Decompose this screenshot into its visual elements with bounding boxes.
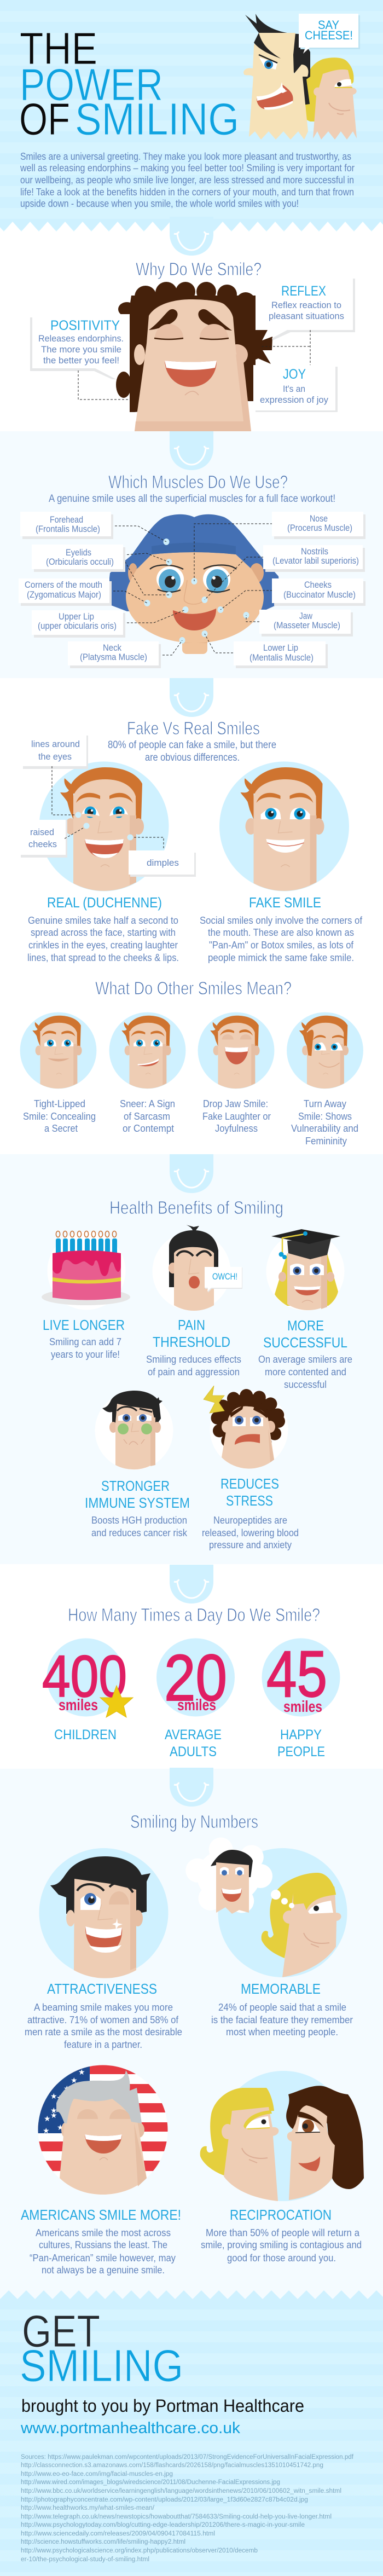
text: attractiveness: attractive. 71% of women and 58% of	[27, 2015, 179, 2025]
stat: children 400 smiles: CHILDREN	[54, 1727, 117, 1743]
label: corners of the mouth	[19, 578, 112, 606]
label: nostrils: Nostrils	[301, 547, 328, 557]
callout: lines around the eyes: lines around	[31, 739, 80, 749]
benefit: pain threshold: THRESHOLD	[153, 1334, 230, 1350]
illustration: american flag man	[33, 2065, 168, 2195]
footer title: get smiling: SMILING	[20, 2340, 183, 2391]
benefit: pain threshold: of pain and aggression	[148, 1367, 240, 1377]
speech bubble: say cheese	[299, 14, 360, 54]
illustration: american flag man: ★	[50, 2111, 57, 2120]
heading: which muscles: Which Muscles Do We Use?	[108, 472, 288, 492]
label: neck	[68, 641, 161, 668]
woman	[298, 57, 357, 140]
text: attractiveness: ATTRACTIVENESS	[47, 1981, 157, 1997]
captions: other smiles: of Sarcasm	[124, 1111, 170, 1122]
title: POWER	[20, 59, 163, 110]
label: cheeks: (Buccinator Muscle)	[283, 590, 356, 600]
text: attractiveness: feature in a partner.	[64, 2039, 142, 2050]
text: fake smile: people mimick the same fake smile.	[208, 952, 354, 963]
stat: children 400 smiles: smiles	[59, 1697, 98, 1714]
stat: average adults 20 smiles: ADULTS	[170, 1744, 217, 1759]
text: memorable	[211, 1981, 353, 2037]
illustration: american flag man: ★	[56, 2093, 63, 2102]
smile tab 3	[170, 678, 213, 717]
callout: positivity: POSITIVITY	[50, 318, 120, 333]
face: turn away	[287, 1012, 363, 1089]
text: americans smile more: not always be a genuine smile.	[42, 2265, 165, 2276]
text: fake smile: the mouth. These are also known as	[208, 927, 354, 938]
heading: why do we smile: Why Do We Smile?	[136, 259, 262, 279]
illustration: american flag man: ★	[50, 2106, 57, 2115]
footer: brought to you by: brought to you by Portman Healthcare	[21, 2396, 304, 2416]
heading: health benefits: Health Benefits of Smiling	[109, 1197, 283, 1218]
title: OF	[19, 94, 70, 144]
benefit: reduces stress	[202, 1475, 299, 1550]
callout: raised cheeks: cheeks	[28, 839, 57, 849]
text: reciprocation	[201, 2207, 362, 2264]
sources: http://www.wired.com/images_blogs/wiredscience/2011/08/Duchenne-FacialExpressions.jpg	[21, 2479, 280, 2486]
callout: reflex: Reflex reaction to	[271, 300, 341, 310]
captions: other smiles: Turn Away	[304, 1098, 346, 1109]
label: nostrils: (Levator labil superioris)	[272, 556, 359, 566]
label: eyelids	[32, 545, 125, 572]
illustration: winking man	[39, 1848, 169, 1978]
callout: reflex: pleasant situations	[269, 311, 344, 321]
illustration: american flag man: ★	[50, 2092, 57, 2100]
illustration: real duchenne smile	[21, 736, 196, 891]
title: THE	[20, 23, 97, 74]
smile tab 5	[170, 1565, 213, 1604]
label: nostrils	[263, 545, 365, 572]
illustration: smiling man and woman	[243, 14, 360, 140]
text: attractiveness	[25, 1981, 182, 2050]
label: cheeks	[272, 578, 365, 606]
benefit: stronger immune system: STRONGER	[101, 1478, 170, 1494]
benefit: stronger immune system: Boosts HGH production	[91, 1515, 187, 1526]
benefit: more successful: SUCCESSFUL	[263, 1334, 347, 1351]
speech bubble: say cheese: CHEESE!	[305, 28, 353, 42]
captions: other smiles: Drop Jaw Smile:	[203, 1098, 268, 1109]
benefit: reduces stress: REDUCES	[220, 1475, 279, 1492]
illustration: face with muscle points	[107, 514, 281, 655]
label: upper lip	[32, 610, 125, 638]
smile tab 2	[170, 431, 213, 470]
callout: dimples	[129, 850, 196, 877]
illustration: curly-haired face with closed eyes	[116, 282, 272, 431]
benefit: live longer: years to your life!	[51, 1349, 120, 1360]
illustration: birthday cake	[42, 1231, 130, 1310]
stat: happy people 45 smiles	[262, 1637, 340, 1759]
benefit: stronger immune system: IMMUNE SYSTEM	[85, 1495, 190, 1511]
sources: http://www.telegraph.co.uk/news/newstopics/howaboutthat/7584633/Smiling-could-help-you-live-longer.html	[21, 2514, 332, 2520]
benefit: pain threshold	[146, 1317, 241, 1377]
captions: other smiles: Femininity	[305, 1136, 347, 1147]
text: memorable: 24% of people said that a smile	[218, 2002, 346, 2013]
label: jaw	[259, 610, 353, 636]
smile tab 6	[170, 1768, 213, 1807]
speech bubble: owch	[205, 1267, 242, 1293]
text: reciprocation: good for those around you.	[227, 2253, 336, 2264]
heading: fake smile: FAKE SMILE	[249, 894, 321, 911]
text: real smile: crinkles in the eyes, creating laughter	[28, 940, 178, 951]
benefit: reduces stress: STRESS	[226, 1492, 273, 1509]
sources: http://www.eo-eo-face.com/img/facial-muscles-en.jpg	[21, 2471, 173, 2477]
label: upper lip: (upper obicularis oris)	[38, 621, 117, 631]
illustration: american flag man: ★	[71, 2076, 78, 2085]
sources	[21, 2454, 354, 2563]
benefit: reduces stress: pressure and anxiety	[209, 1539, 292, 1550]
label: forehead: (Frontalis Muscle)	[36, 524, 100, 534]
text: real smile: Genuine smiles take half a second to	[28, 915, 178, 926]
man	[243, 14, 310, 140]
benefit: stronger immune system	[85, 1478, 190, 1538]
captions: other smiles	[23, 1098, 358, 1147]
subtitle: fake vs real: are obvious differences.	[145, 752, 240, 763]
brunette face	[286, 2086, 364, 2200]
illustration: stressed face	[204, 1386, 288, 1469]
benefit: reduces stress: released, lowering blood	[202, 1527, 299, 1538]
illustration: american flag man: ★	[43, 2126, 50, 2135]
sources: http://www.sciencedaily.com/releases/2009/04/090417084115.html	[21, 2531, 215, 2537]
illustration: american flag man: ★	[63, 2084, 71, 2093]
heading: smiling by numbers: Smiling by Numbers	[130, 1811, 258, 1832]
illustration: woman remembering a smile	[197, 1848, 347, 1977]
speech bubble: owch: OWCH!	[212, 1271, 237, 1282]
blonde face	[200, 2088, 278, 2201]
subtitle: fake vs real: 80% of people can fake a smile, but there	[108, 739, 276, 751]
callout: raised cheeks	[21, 820, 67, 858]
label: nose: (Procerus Muscle)	[287, 523, 352, 533]
captions: other smiles: a Secret	[44, 1123, 78, 1134]
heading: other smiles: What Do Other Smiles Mean?	[95, 978, 292, 998]
callout: lines around the eyes	[23, 736, 88, 769]
text: memorable: MEMORABLE	[241, 1981, 321, 1997]
footer title: get smiling	[20, 2306, 183, 2391]
sources: er-10/the-psychological-study-of-smiling.html	[21, 2556, 149, 2563]
benefit: live longer	[43, 1317, 125, 1360]
illustration: pain face	[152, 1225, 242, 1311]
text: reciprocation: smile, proving smiling is contagious and	[201, 2239, 362, 2250]
stat: average adults 20 smiles: 20	[164, 1641, 227, 1715]
intro text: upside down - because when you smile, the whole world smiles with you!	[20, 198, 299, 209]
benefit: more successful: successful	[284, 1379, 327, 1390]
stat: children 400 smiles: 400	[42, 1643, 127, 1709]
callout: dimples: dimples	[147, 858, 179, 868]
benefit: more successful	[258, 1317, 352, 1390]
intro text	[20, 151, 355, 209]
label: corners of the mouth: Corners of the mouth	[25, 580, 102, 590]
benefit: stronger immune system: and reduces cancer risk	[91, 1527, 188, 1538]
label: neck: Neck	[103, 643, 122, 653]
thought bubble	[197, 1849, 294, 1914]
label: lower lip	[234, 641, 328, 668]
speech bubble: say cheese: SAY	[318, 18, 339, 32]
sources: http://www.bbc.co.uk/worldservice/learningenglish/language/wordsinthenews/2010/06/100602_witn_smile.shtml	[21, 2488, 341, 2494]
label: jaw: Jaw	[299, 611, 312, 621]
label: nose: Nose	[310, 514, 328, 524]
stat: average adults 20 smiles	[156, 1639, 235, 1759]
text: memorable: most when meeting people.	[226, 2027, 338, 2037]
label: forehead: Forehead	[50, 515, 83, 525]
text: real smile: spread across the face, starting with	[31, 927, 176, 938]
smile tab 4	[170, 1154, 213, 1193]
captions: other smiles: Smile: Concealing	[23, 1111, 96, 1122]
face: sneer	[109, 1012, 185, 1089]
sources: http://science.howstuffworks.com/life/smiling-happy2.html	[21, 2539, 185, 2545]
text: fake smile: "Pan-Am" or Botox smiles, as lots of	[209, 940, 354, 951]
label: eyelids: (Orbicularis occuli)	[46, 557, 114, 567]
icon: star	[100, 1686, 133, 1717]
benefit: more successful: MORE	[287, 1317, 324, 1334]
callout: positivity	[30, 314, 130, 400]
callout: reflex: REFLEX	[281, 283, 326, 299]
footer: website: www.portmanhealthcare.co.uk	[20, 2419, 241, 2437]
captions: other smiles: Smile: Shows	[298, 1111, 352, 1122]
callout: positivity: the better you feel!	[43, 355, 119, 366]
subtitle: muscles: A genuine smile uses all the superficial muscles for a full face workout!	[49, 493, 335, 505]
callout: joy	[253, 365, 338, 412]
callout: joy: It's an	[283, 384, 305, 394]
captions: other smiles: Fake Laughter or	[202, 1111, 271, 1122]
face: tight-lipped	[20, 1012, 96, 1089]
illustration: immune face	[95, 1391, 173, 1470]
sources: http://photographyconcentrate.com/wp-content/uploads/2012/03/large_1f3d60e2827c87b4c02d.jpg	[21, 2497, 308, 2503]
text: attractiveness: A beaming smile makes you more	[34, 2002, 173, 2013]
label: cheeks: Cheeks	[304, 580, 332, 590]
heading: how many times: How Many Times a Day Do We Smile?	[68, 1605, 320, 1625]
illustration: fake smile	[219, 762, 349, 891]
benefit: more successful: On average smilers are	[258, 1354, 352, 1365]
illustration: reciprocating couple	[200, 2071, 364, 2201]
captions: other smiles: Sneer: A Sign	[120, 1098, 175, 1109]
benefit: live longer: Smiling can add 7	[49, 1336, 121, 1347]
benefit: pain threshold: Smiling reduces effects	[146, 1354, 241, 1365]
sources: http://www.psychologytoday.com/blog/cutting-edge-leadership/201206/there-s-magic-in-your-smile	[21, 2522, 305, 2528]
benefit: reduces stress: Neuropeptides are	[213, 1515, 287, 1526]
text: americans smile more: Americans smile the most across	[36, 2227, 171, 2238]
benefit: more successful: more contented and	[265, 1367, 346, 1377]
label: upper lip: Upper Lip	[59, 612, 94, 622]
text: americans smile more	[21, 2207, 181, 2276]
stat: happy people 45 smiles: smiles	[283, 1698, 322, 1716]
label: corners of the mouth: (Zygomaticus Major)	[27, 590, 101, 600]
label: forehead	[20, 512, 113, 539]
face: drop jaw	[198, 1012, 274, 1089]
text: reciprocation: RECIPROCATION	[230, 2207, 332, 2223]
callout: lines around the eyes: the eyes	[38, 751, 72, 762]
label: eyelids: Eyelids	[66, 548, 91, 558]
captions: other smiles: Joyfulness	[215, 1123, 258, 1134]
label: lower lip: (Mentalis Muscle)	[249, 653, 314, 663]
text: real smile: lines, that spread to the cheeks & lips.	[27, 952, 179, 963]
label: jaw: (Masseter Muscle)	[274, 621, 340, 630]
text: americans smile more: “Pan-American” smile however, may	[30, 2253, 176, 2264]
captions: other smiles: Tight-Lipped	[34, 1098, 85, 1109]
illustration: american flag man: ★	[44, 2114, 51, 2123]
benefit: live longer: LIVE LONGER	[43, 1317, 125, 1333]
stat: children 400 smiles	[42, 1639, 133, 1743]
benefit: pain threshold: PAIN	[178, 1317, 205, 1333]
callout: reflex	[256, 279, 355, 365]
heading: real duchenne: REAL (DUCHENNE)	[47, 894, 162, 911]
text: memorable: is the facial feature they remember	[211, 2015, 353, 2025]
illustration: american flag man: ★	[78, 2068, 85, 2076]
sources: http://www.healthworks.my/what-smiles-mean/	[21, 2505, 155, 2511]
label: nose	[272, 512, 365, 539]
label: neck: (Platysma Muscle)	[80, 652, 147, 662]
text: reciprocation: More than 50% of people will return a	[206, 2227, 360, 2238]
stat: happy people 45 smiles: HAPPY	[280, 1727, 322, 1743]
text: real smile	[27, 915, 179, 963]
icon: lightning bolt	[204, 1386, 224, 1413]
callout: joy: JOY	[283, 367, 306, 382]
subtitle: fake vs real	[108, 739, 276, 763]
captions: other smiles: Vulnerability and	[291, 1123, 358, 1134]
text: americans smile more: cultures, Russians the least. The	[39, 2239, 167, 2250]
smile tab 1	[170, 217, 213, 256]
callout: positivity: Releases endorphins.	[38, 333, 124, 344]
title	[19, 23, 239, 144]
footer title: get smiling: GET	[22, 2306, 100, 2357]
heading: fake vs real: Fake Vs Real Smiles	[127, 718, 260, 738]
sources: http://www.psychologicalscience.org/index.php/publications/observer/2010/decemb	[21, 2548, 258, 2554]
stat: happy people 45 smiles: PEOPLE	[277, 1744, 325, 1759]
sources: Sources: https://www.paulekman.com/wpcontent/uploads/2013/07/StrongEvidenceForUniversalInFacialExpression.pdf	[21, 2454, 354, 2461]
text: americans smile more: AMERICANS SMILE MORE!	[21, 2207, 181, 2223]
stat: happy people 45 smiles: 45	[266, 1637, 327, 1711]
captions: other smiles: or Contempt	[123, 1123, 174, 1134]
callout: joy: expression of joy	[260, 395, 328, 405]
callout: positivity: The more you smile	[41, 344, 121, 355]
callout: raised cheeks: raised	[30, 827, 54, 837]
text: fake smile: Social smiles only involve the corners of	[200, 915, 363, 926]
text: attractiveness: men rate a smile as the most desirable	[25, 2027, 182, 2037]
stat: average adults 20 smiles: smiles	[177, 1697, 216, 1714]
sources: http://classconnection.s3.amazonaws.com/158/flashcards/2026158/png/facialmuscles1351010451742.png	[21, 2462, 323, 2469]
illustration: american flag man: ★	[57, 2123, 64, 2132]
stat: average adults 20 smiles: AVERAGE	[165, 1727, 222, 1743]
label: lower lip: Lower Lip	[263, 643, 298, 653]
illustration: graduate woman	[266, 1229, 345, 1310]
title: SMILING	[75, 94, 239, 144]
text: fake smile	[200, 915, 363, 963]
